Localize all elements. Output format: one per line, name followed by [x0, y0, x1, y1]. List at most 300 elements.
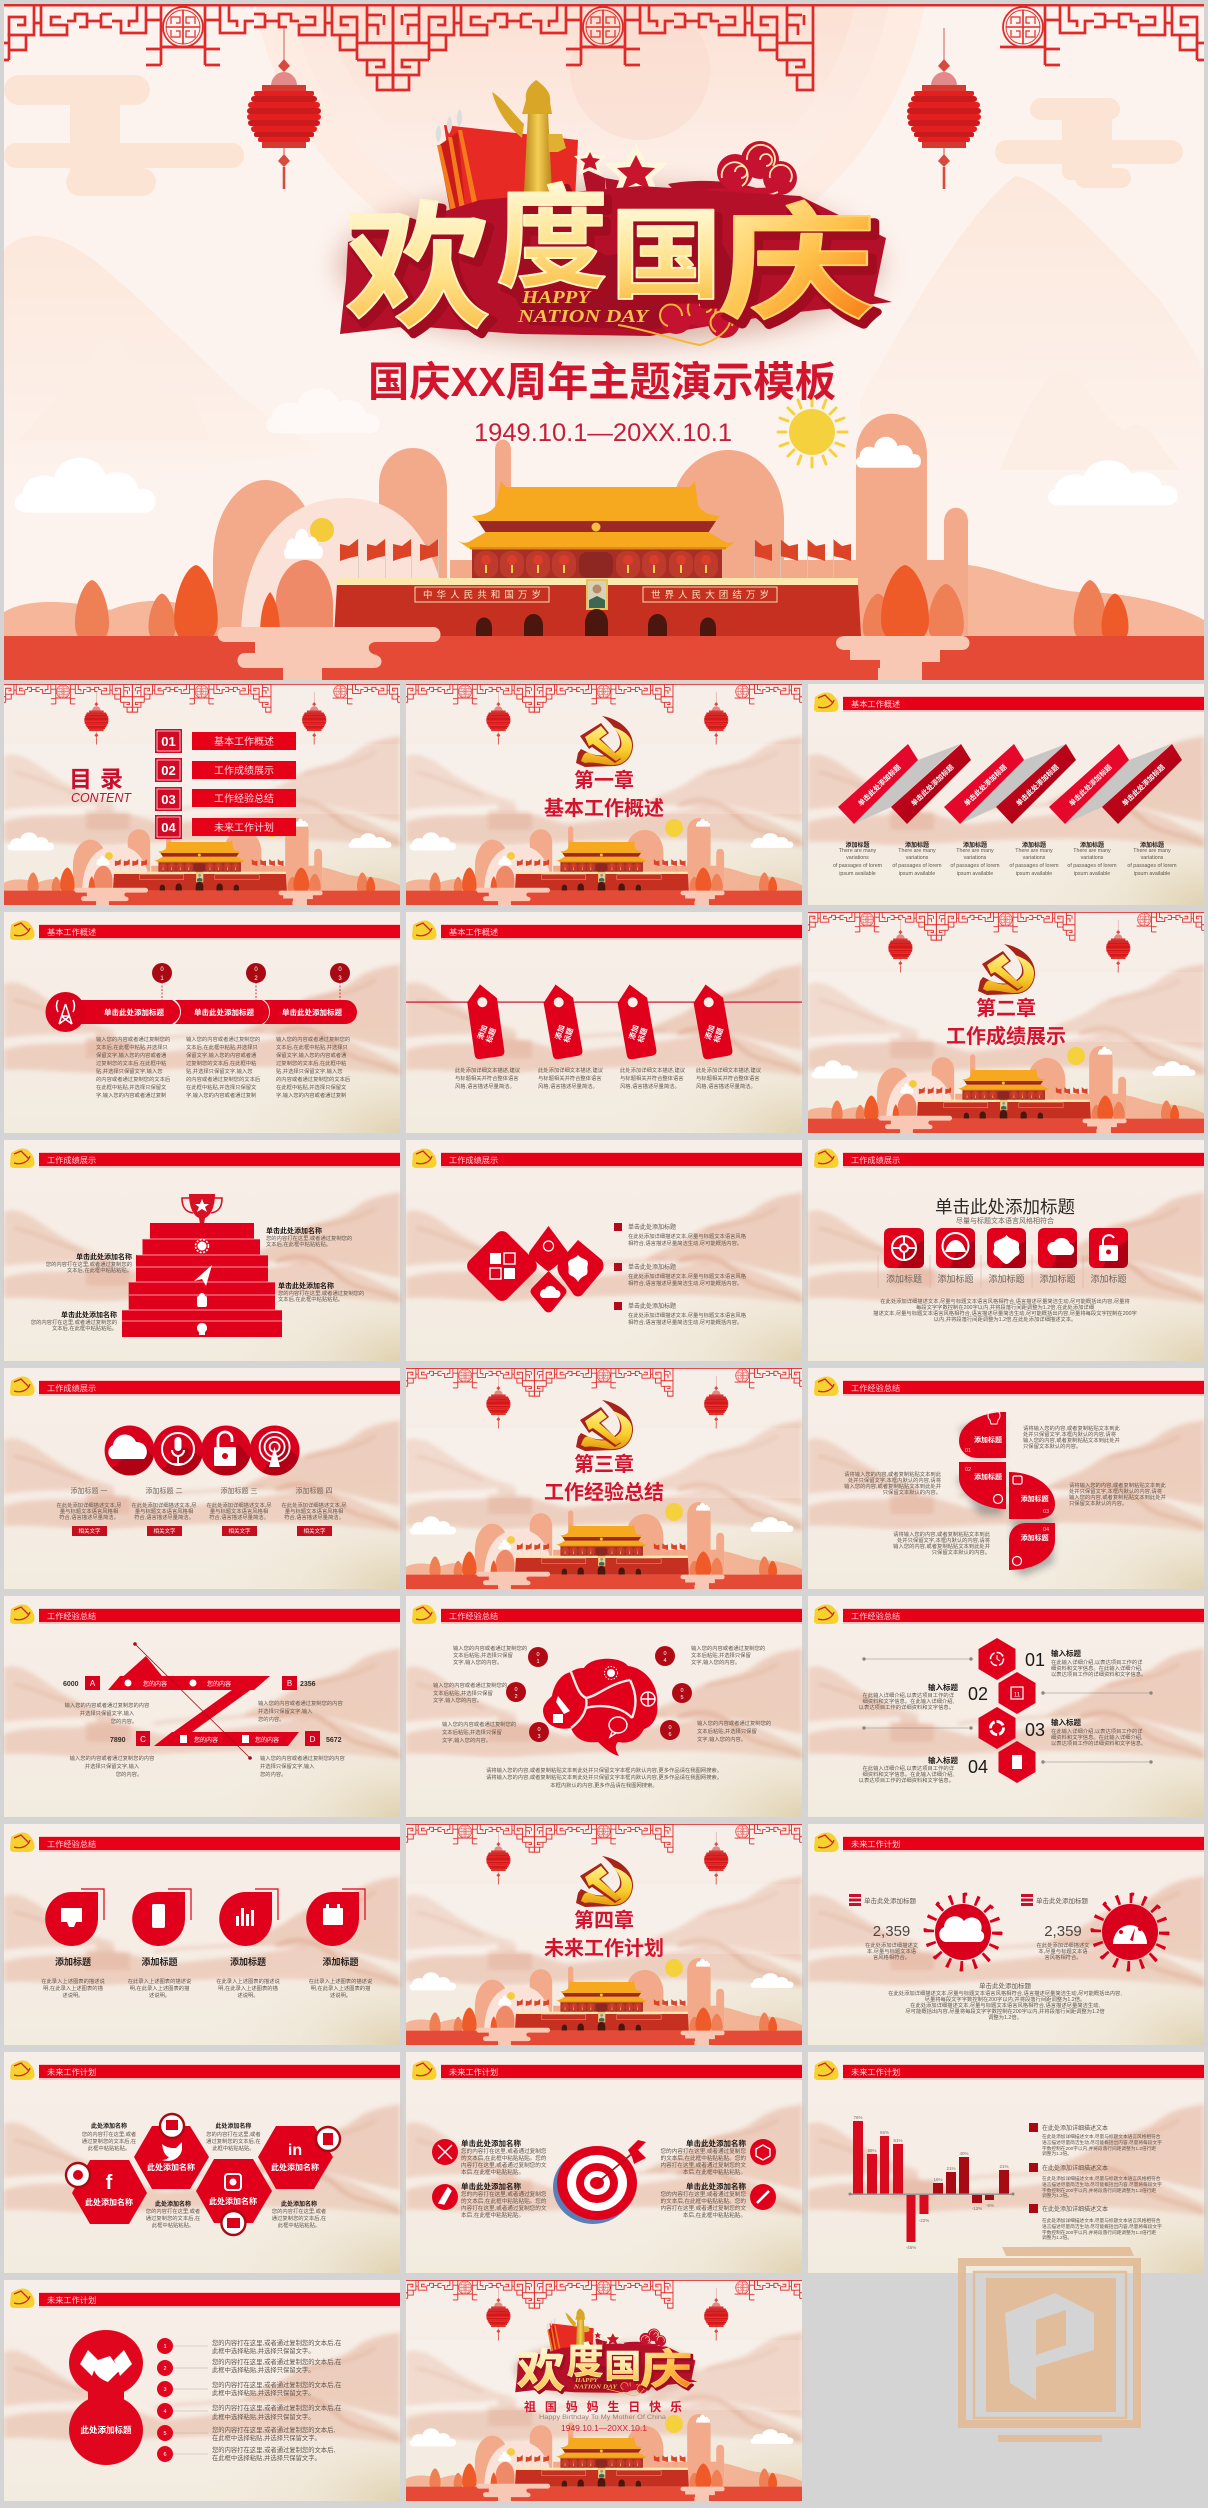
- column texts: 明,在此录入上述图表的描: [218, 1984, 279, 1992]
- text 4: 您的内容。: [260, 1770, 286, 1778]
- text 3: 处并只保留文字,本框内默认的内容,请将: [1069, 1487, 1163, 1495]
- stat text right: 言风格相符合。: [1044, 1953, 1082, 1961]
- ribbons: [838, 744, 1182, 824]
- banner slogans: [423, 589, 769, 601]
- header title: 工作经验总结: [851, 1611, 900, 1621]
- background: [4, 1824, 400, 2045]
- pins: 0: [254, 967, 258, 973]
- captions: variations: [846, 855, 869, 861]
- closing title: 祖国妈妈生日快乐: [524, 2399, 682, 2414]
- list item 1: [1029, 2123, 1162, 2157]
- petal 1: [959, 1410, 1006, 1458]
- text 1: 请将输入您的内容,或者复制粘贴文本到此: [1023, 1424, 1121, 1432]
- list item 04: [155, 815, 296, 839]
- text block D: 您的内容打在这里,或者通过复制您的: [31, 1318, 117, 1326]
- text right 1: 单击此处添加名称: [686, 2138, 746, 2148]
- pins: 0: [160, 967, 164, 973]
- text blocks: 文本后粘贴,并选择只保留: [433, 1689, 493, 1697]
- item 02 text: 以表达项目工作的详细资料和文字信息。: [859, 1703, 954, 1711]
- captions: There are many: [839, 848, 877, 854]
- panel: slide numbered list: [4, 2280, 400, 2501]
- captions: There are many: [898, 848, 936, 854]
- list item 2: 在此处添加详细描述文本,尽量与标题文本语言风格: [628, 1272, 747, 1280]
- tag 1: [465, 982, 505, 1060]
- text block 2: 您的内容打在这里,或者: [206, 2130, 261, 2138]
- list item 1: 字数控制在200字以内,并将段落行间距调整为1.2倍行距: [1042, 2145, 1156, 2152]
- circle labels: 添加标题 二: [146, 1486, 182, 1495]
- tag 3: 添加: [626, 1024, 641, 1041]
- column text 2: 贴,并选择只保留文字,输入您: [186, 1067, 253, 1075]
- titles: 添加标题: [55, 1956, 91, 1967]
- list text: 您的内容打在这里,或者通过复制您的文本后,在: [212, 2380, 341, 2389]
- pins: 0: [338, 967, 342, 973]
- number dots: 3: [163, 2387, 167, 2393]
- list text: 您的内容打在这里,或者通过复制您的文本后,在: [212, 2338, 341, 2347]
- titles: 添加标题: [141, 1956, 178, 1967]
- text block A: 文本后,在此框中粘贴粘贴。: [266, 1240, 331, 1248]
- text 1: 输入您的内容,或者复制粘贴文本到此处并: [1023, 1436, 1121, 1444]
- list item 2: [614, 1263, 747, 1287]
- caption texts: 此处添加详细文本描述,建议: [455, 1066, 521, 1074]
- titles: 添加标题: [230, 1956, 266, 1967]
- chapter number: 第四章: [574, 1908, 634, 1932]
- header: [10, 1833, 400, 1852]
- column texts: 符合,语言描述尽量简洁。: [284, 1513, 344, 1521]
- stat text left: 言风格相符合。: [873, 1953, 910, 1961]
- hexagon 4: 此处添加名称: [271, 2162, 319, 2172]
- list text: 此框中选择粘贴,并选择只保留文字。: [212, 2412, 314, 2421]
- captions: of passages of lorem: [1009, 863, 1059, 869]
- pins: 3: [338, 976, 342, 982]
- text right 1: 的文本后,在此框中粘贴粘贴。您的: [661, 2154, 746, 2162]
- label D: 5672: [326, 1737, 342, 1744]
- logo: 国: [604, 2349, 641, 2385]
- hexagon 1: f: [106, 2172, 113, 2194]
- text 1: 只保留文本默认的内容。: [1023, 1442, 1081, 1450]
- logo: 欢度国庆 3D title: 度: [501, 183, 613, 308]
- column texts: 明,在此录入上述图表的描: [43, 1984, 104, 1992]
- logo: 庆: [642, 2348, 694, 2394]
- panel: slide hex timeline: [808, 1596, 1204, 1817]
- column texts: 符合,语言描述尽量简洁。: [59, 1513, 119, 1521]
- background: [808, 1596, 1204, 1817]
- icon: handshake: [80, 2350, 132, 2382]
- item 01 text: 细资料和文字信息。在此输入详细介绍,: [1051, 1664, 1143, 1672]
- petal 2: 添加标题: [974, 1472, 1002, 1481]
- bottom text: 尽量将每段文字字数控制在200字以内,并将段落行间距调整为1.2倍。: [925, 1995, 1085, 2003]
- chapter title: 工作经验总结: [544, 1480, 664, 1504]
- list item 2: 在此处添加详细描述文本,尽量与标题文本语言风格相符合: [1042, 2175, 1161, 2182]
- stat right: 2,359: [1044, 1923, 1082, 1940]
- banner slogans: 世界人民大团结万岁: [651, 589, 769, 601]
- list text: 在此框中选择粘贴,并选择只保留文字。: [212, 2453, 321, 2462]
- captions: There are many: [1133, 848, 1171, 854]
- header: [412, 1605, 802, 1624]
- column texts: 在此录入上述图表的描述说: [216, 1977, 280, 1985]
- stat text left: 本,尽量与标题文本语: [867, 1947, 917, 1955]
- text left 1: 内容打在这里,或者通过复制您的文: [461, 2161, 547, 2169]
- panel: slide rounded steps: [808, 1368, 1204, 1589]
- subtitle: 国庆XX周年主题演示模板: [368, 359, 836, 405]
- bar chart: 55%: [867, 2148, 877, 2153]
- background: [808, 2052, 1204, 2273]
- tag 2: 标题: [561, 1026, 575, 1044]
- background: [4, 1596, 400, 1817]
- panel: slide four circles: [4, 1368, 400, 1589]
- panel: closing slide: [396, 2280, 888, 2501]
- hexagon 4: in: [288, 2142, 302, 2159]
- text block 4: 您的内容打在这里,或者: [272, 2207, 326, 2215]
- list text: 您的内容打在这里,或者通过复制您的文本后,在: [212, 2403, 341, 2412]
- icon: trophy: [182, 1194, 222, 1224]
- background: [406, 1596, 802, 1817]
- label A: 6000: [63, 1681, 79, 1688]
- numbered dots: 0: [668, 1725, 672, 1731]
- text 3: 输入您的内容,或者复制粘贴文本到此处并: [1069, 1493, 1167, 1501]
- Z shape: 您的内容: [143, 1680, 167, 1688]
- label C: [110, 1731, 150, 1746]
- chapter title: 工作成绩展示: [946, 1024, 1066, 1048]
- text block 2: 此框中粘贴粘贴。: [212, 2144, 255, 2152]
- numbered dots: 3: [537, 1734, 541, 1740]
- circles with icons: [105, 1426, 300, 1476]
- teardrop 3: [219, 1889, 278, 1946]
- text 2: 只保留文本默认的内容。: [883, 1488, 941, 1496]
- stairs: [122, 1223, 282, 1337]
- titles: 添加标题: [322, 1956, 359, 1967]
- text 4: 输入您的内容或者通过复制您的内容: [260, 1754, 345, 1762]
- tag 2: 添加: [552, 1024, 567, 1041]
- column text 2: 保留文字,输入您的内容或者通: [186, 1051, 257, 1059]
- Z shape: [108, 1642, 299, 1760]
- header: [10, 1605, 400, 1624]
- Z shape: 您的内容: [255, 1736, 279, 1744]
- text left 2: 内容打在这里,或者通过复制您的文: [461, 2204, 547, 2212]
- hexagon 4: [258, 2126, 333, 2189]
- text block 3: 此处添加名称: [155, 2200, 191, 2208]
- logo: 度: [568, 2343, 605, 2384]
- column texts: 量与标题文本语言风格相: [210, 1507, 268, 1515]
- background: [406, 1140, 802, 1361]
- slide title: 单击此处添加标题: [935, 1197, 1075, 1217]
- panel: slide stairs: [4, 1140, 400, 1361]
- numbered dots: 0: [680, 1688, 684, 1694]
- text 1: 处并只保留文字,本框内默认的内容,请将: [1023, 1430, 1117, 1438]
- column texts: 在此录入上述图表的描述说: [309, 1977, 373, 1985]
- caption texts: 与标题相关并符合整体语言: [538, 1074, 602, 1082]
- text right 1: 本后,在此框中粘贴粘贴。: [683, 2168, 746, 2176]
- hexagon 1: 此处添加名称: [85, 2197, 133, 2207]
- list text: 您的内容打在这里,或者通过复制您的文本后,: [212, 2425, 335, 2434]
- closing background: [396, 2280, 888, 2501]
- bar chart: 21%: [946, 2166, 956, 2171]
- column texts: 在此录入上述图表的描述说: [128, 1977, 192, 1985]
- list item 2: [1029, 2163, 1162, 2199]
- list item 02: 工作成绩展示: [214, 764, 274, 777]
- hex 03: [978, 1707, 1016, 1749]
- captions: variations: [964, 855, 987, 861]
- text left 1: 您的内容打在这里,或者通过复制您: [461, 2147, 547, 2155]
- item 01 text: 以表达项目工作的详细资料和文字信息。: [1051, 1670, 1146, 1678]
- header title: 工作成绩展示: [851, 1155, 900, 1165]
- header: [814, 2061, 1204, 2080]
- captions: variations: [1023, 855, 1046, 861]
- header: [814, 1149, 1204, 1168]
- list item 3: 在此处添加详细描述文本,尽量与标题文本语言风格相符合: [1042, 2217, 1161, 2224]
- panel: slide bar chart: [808, 2052, 1204, 2273]
- numbered dots: 4: [663, 1658, 667, 1664]
- caption texts: 风格,语言描述尽量简洁。: [696, 1082, 756, 1090]
- sun icon gauge: [1092, 1894, 1168, 1970]
- tag 4: 标题: [711, 1026, 725, 1044]
- logo: 欢度国庆 3D title: HAPPY: [521, 287, 592, 307]
- logo: 欢: [519, 2348, 567, 2398]
- panel: slide teardrops: [4, 1824, 400, 2045]
- panel: slide hanging tags: [406, 912, 802, 1133]
- bar chart: 21%: [999, 2164, 1009, 2169]
- item heading right: 单击此处添加标题: [1036, 1896, 1088, 1905]
- list item 3: [1029, 2204, 1162, 2241]
- diamond icons: [490, 1241, 588, 1298]
- pins: 2: [254, 976, 258, 982]
- numbers: 02: [968, 1684, 988, 1704]
- caption texts: 与标题相关并符合整体语言: [696, 1074, 760, 1082]
- logo: 度: [567, 2341, 604, 2382]
- list item 3: 字数控制在200字以内,并将段落行间距调整为1.2倍行距: [1042, 2229, 1156, 2236]
- bar chart: 40%: [959, 2151, 969, 2156]
- label B: B: [287, 1679, 292, 1688]
- header: [412, 1149, 802, 1168]
- item 03 text: 在此输入详细介绍,以表达项目工作的详: [1051, 1727, 1143, 1735]
- number dots: 6: [163, 2452, 167, 2458]
- text block 3: 此框中粘贴粘贴。: [152, 2221, 194, 2229]
- caption texts: 此处添加详细文本描述,建议: [696, 1066, 762, 1074]
- header: [814, 693, 1204, 712]
- hexagon 3: [196, 2159, 272, 2223]
- column texts: [41, 1977, 373, 1999]
- logo: [515, 2308, 697, 2398]
- column text 2: 输入您的内容或者通过复制您的: [186, 1035, 260, 1043]
- circle labels: 添加标题 三: [221, 1486, 257, 1495]
- panel: slide diamonds: [406, 1140, 802, 1361]
- numbered dots: 2: [514, 1694, 518, 1700]
- captions: of passages of lorem: [950, 863, 1000, 869]
- captions: ipsum available: [957, 871, 993, 877]
- panel: chapter 1: [396, 684, 888, 905]
- text block 1: 此处添加名称: [91, 2122, 127, 2130]
- bottom text: 在此处添加详细描述文本,尽量与标题文本语言风格相符合,语言描述尽量简洁生动,尽可能概括出内容,: [888, 1989, 1122, 1997]
- text 1: 输入您的内容或者通过复制您的内容: [65, 1701, 150, 1709]
- logo: HAPPY: [574, 2378, 599, 2384]
- text blocks: 文字,输入您的内容。: [442, 1736, 491, 1744]
- tile labels: 添加标题: [988, 1273, 1025, 1284]
- column texts: 明,在此录入上述图表的描: [311, 1984, 371, 1992]
- text blocks: 文本后粘贴,并选择只保留: [453, 1651, 513, 1659]
- item heading right: [1021, 1894, 1088, 1906]
- bar chart: -22%: [919, 2218, 929, 2223]
- text 4: 只保留文本默认的内容。: [932, 1548, 990, 1556]
- item 02 text: 在此输入详细介绍,以表达项目工作的详: [862, 1691, 955, 1699]
- text block 1: 通过复制您的文本后,在: [82, 2137, 136, 2145]
- numbers: 03: [1025, 1720, 1045, 1740]
- numbered dots: 1: [536, 1659, 540, 1665]
- banner slogans: 中华人民共和国万岁: [423, 589, 541, 601]
- column texts: 述说明。: [237, 1991, 259, 1999]
- column text 3: 的内容或者通过复制您的文本后: [276, 1075, 351, 1083]
- item 04 text: 输入标题: [928, 1755, 958, 1765]
- text block 2: 此处添加名称: [215, 2122, 251, 2130]
- ribbons: 单击此处添加标题: [1067, 763, 1114, 808]
- circle labels: 添加标题 一: [71, 1486, 107, 1495]
- tag 3: 标题: [635, 1026, 649, 1044]
- circle labels: 添加标题 四: [296, 1486, 332, 1495]
- background: [406, 912, 802, 1133]
- tag 1: 添加: [475, 1023, 489, 1041]
- target: [553, 2140, 646, 2224]
- numbered dots: 0: [536, 1652, 540, 1658]
- text 4: 并选择只保留文字,输入: [260, 1762, 315, 1770]
- column texts: 在此处添加详细描述文本,尽: [206, 1501, 272, 1509]
- header: [10, 921, 400, 940]
- circle labels: [71, 1486, 332, 1495]
- two circles: [69, 2330, 143, 2465]
- logo: 欢度国庆 3D title: 庆: [718, 195, 876, 335]
- captions: 添加标题: [963, 841, 987, 849]
- numbered dots: [506, 1646, 692, 1742]
- ring icons: [66, 2114, 340, 2235]
- chapter title: 未来工作计划: [544, 1937, 664, 1960]
- panel: slide hexagons: [4, 2052, 400, 2273]
- header: [10, 2289, 400, 2308]
- text 2: 输入您的内容或者通过复制您的内容: [258, 1699, 343, 1707]
- text blocks: 文本后粘贴,并选择只保留: [442, 1728, 502, 1736]
- logo: 欢: [517, 2346, 565, 2396]
- pill bar: 单击此处添加标题: [104, 1007, 164, 1017]
- stat left: 2,359: [873, 1923, 910, 1940]
- list item 04: 未来工作计划: [214, 821, 274, 834]
- text block D: 文本后,在此框中粘贴粘贴。: [52, 1324, 117, 1332]
- pill bar: 单击此处添加标题: [282, 1007, 342, 1017]
- list item 1: [614, 1223, 747, 1247]
- header title: 未来工作计划: [851, 2067, 900, 2077]
- header title: 工作成绩展示: [449, 1155, 498, 1165]
- logo: 欢度国庆 3D title: NATION DAY: [517, 306, 650, 326]
- icon: emblem: [576, 1400, 633, 1451]
- list text: [212, 2338, 341, 2462]
- chapter background: [396, 1824, 888, 2045]
- captions: 添加标题: [1080, 841, 1104, 849]
- numbers: [968, 1650, 1045, 1777]
- diamonds: [464, 1226, 604, 1312]
- bottom text: 请将输入您的内容,或者复制粘贴文本到此处并只保留文字本框内默认内容,更多作品请在我图网搜索。: [486, 1773, 722, 1781]
- list item 04: 04: [161, 820, 176, 835]
- text blocks: 输入您的内容或者通过复制您的: [453, 1644, 527, 1652]
- text 4: 请将输入您的内容,或者复制粘贴文本到此: [893, 1530, 991, 1538]
- number dots: 1: [163, 2344, 167, 2350]
- petal 2: [959, 1462, 1006, 1509]
- panel: slide red suns: [808, 1824, 1204, 2045]
- ribbons: 单击此处添加标题: [1120, 763, 1167, 808]
- hexagon 1: [72, 2160, 147, 2224]
- small icon circles: [432, 2139, 776, 2210]
- header: [10, 1149, 400, 1168]
- titles: [55, 1956, 359, 1967]
- item 02 text: 输入标题: [928, 1682, 958, 1692]
- closing date: 1949.10.1—20XX.10.1: [561, 2424, 648, 2433]
- text blocks: 输入您的内容或者通过复制您的: [442, 1720, 516, 1728]
- header title: 基本工作概述: [47, 927, 96, 937]
- column text 2: 在此框中粘贴,并选择只保留文: [186, 1083, 257, 1091]
- pins: [152, 963, 350, 1000]
- text left 2: 单击此处添加名称: [461, 2181, 521, 2191]
- label B: [282, 1676, 316, 1690]
- bottom text: 请将输入您的内容,或者复制粘贴文本到此处并只保留文字本框内默认内容,更多作品请在我图网搜索。: [486, 1766, 722, 1774]
- list item 1: 相符合,语言描述尽量简洁生动,尽可能概括内容。: [628, 1239, 742, 1247]
- header title: 基本工作概述: [449, 927, 498, 937]
- tag 3: [615, 982, 657, 1060]
- column texts: 量与标题文本语言风格相: [285, 1507, 343, 1515]
- captions: 添加标题: [1140, 841, 1164, 849]
- captions: of passages of lorem: [892, 863, 942, 869]
- header title: 未来工作计划: [851, 1839, 900, 1849]
- header: [10, 1377, 400, 1396]
- text 3: 请将输入您的内容,或者复制粘贴文本到此: [1069, 1481, 1167, 1489]
- header title: 未来工作计划: [47, 2295, 96, 2305]
- hex 02: [998, 1672, 1036, 1714]
- item 03 text: 输入标题: [1051, 1717, 1081, 1727]
- label C: C: [140, 1735, 146, 1744]
- column texts: 量与标题文本语言风格相: [60, 1507, 118, 1515]
- logo: 欢度国庆 3D title: 国: [615, 207, 727, 318]
- contents subheading: CONTENT: [71, 790, 132, 805]
- watermark stamp: [962, 2247, 1137, 2442]
- text block B: 您的内容打在这里,或者通过复制您的: [46, 1260, 132, 1268]
- text right 2: 本后,在此框中粘贴粘贴。: [683, 2211, 746, 2219]
- number dots: 4: [163, 2409, 167, 2415]
- column texts: 明,在此录入上述图表的描: [130, 1984, 190, 1992]
- captions: variations: [1081, 855, 1104, 861]
- list item 2: 调整为1.2倍。: [1042, 2192, 1072, 2199]
- hex 02: 11: [1014, 1692, 1021, 1698]
- column text 2: 文本后,在此框中粘贴,并选择只: [186, 1043, 258, 1051]
- caption texts: 风格,语言描述尽量简洁。: [538, 1082, 598, 1090]
- closing subtitle: Happy Birthday To My Mother Of China: [539, 2414, 666, 2421]
- tile labels: 添加标题: [937, 1273, 974, 1284]
- panel: chapter 4: [396, 1824, 888, 2045]
- text right 1: 您的内容打在这里,或者通过复制您: [661, 2147, 746, 2155]
- item 01 text: 输入标题: [1051, 1648, 1081, 1658]
- stat text left: 在此处添加详细描述文: [865, 1941, 919, 1949]
- numbered dots: 0: [537, 1727, 541, 1733]
- text block 1: 您的内容打在这里,或者: [82, 2130, 136, 2138]
- header title: 基本工作概述: [851, 699, 900, 709]
- stair icons: [194, 1240, 212, 1335]
- list text: 此框中选择粘贴,并选择只保留文字。: [212, 2346, 314, 2355]
- stat text right: 在此处添加详细描述文: [1037, 1941, 1090, 1949]
- numbers: 04: [968, 1757, 988, 1777]
- panel: slide brain bubble: [406, 1596, 802, 1817]
- caption texts: 此处添加详细文本描述,建议: [620, 1066, 686, 1074]
- text blocks: 文字,输入您的内容。: [453, 1658, 502, 1666]
- petal 1: 01: [965, 1448, 971, 1454]
- chapter background: [798, 912, 1208, 1133]
- list item 1: 调整为1.2倍。: [1042, 2150, 1072, 2157]
- header title: 工作经验总结: [47, 1611, 96, 1621]
- text block A: 您的内容打在这里,或者通过复制您的: [266, 1234, 352, 1242]
- item heading left: [849, 1894, 916, 1906]
- tile labels: [886, 1273, 1127, 1284]
- list text: 您的内容打在这里,或者通过复制您的文本后,: [212, 2445, 335, 2454]
